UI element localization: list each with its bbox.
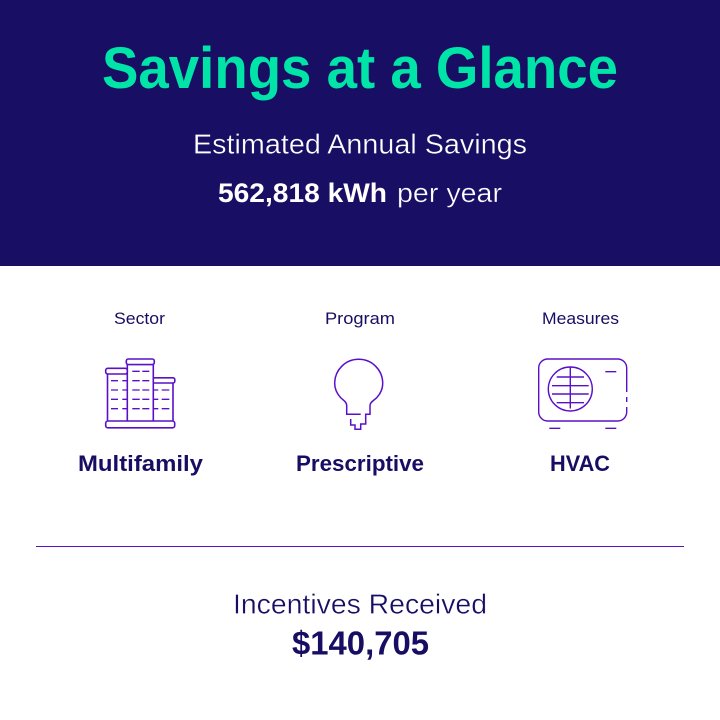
panel: sector	[78, 309, 204, 476]
annual savings figure: 562,818 kWh	[218, 178, 387, 208]
panel: header	[0, 0, 720, 266]
annual savings figure	[218, 178, 502, 208]
icon: light bulb	[335, 359, 383, 429]
program label: Program	[325, 309, 395, 328]
title: Savings at a Glance	[102, 36, 618, 101]
panel: incentives	[233, 588, 487, 662]
panel: measures	[539, 309, 627, 476]
subtitle: Estimated Annual Savings	[193, 128, 527, 160]
incentives label: Incentives Received	[233, 588, 487, 620]
incentives amount: $140,705	[292, 624, 429, 662]
measures label: Measures	[542, 309, 619, 328]
icon: HVAC unit	[539, 359, 627, 428]
program value: Prescriptive	[296, 451, 424, 476]
annual savings figure: per year	[397, 178, 502, 208]
icon: buildings	[106, 359, 175, 428]
measures value: HVAC	[550, 451, 610, 476]
sector value: Multifamily	[78, 451, 204, 476]
panel: program	[296, 309, 424, 476]
sector label: Sector	[114, 309, 165, 328]
